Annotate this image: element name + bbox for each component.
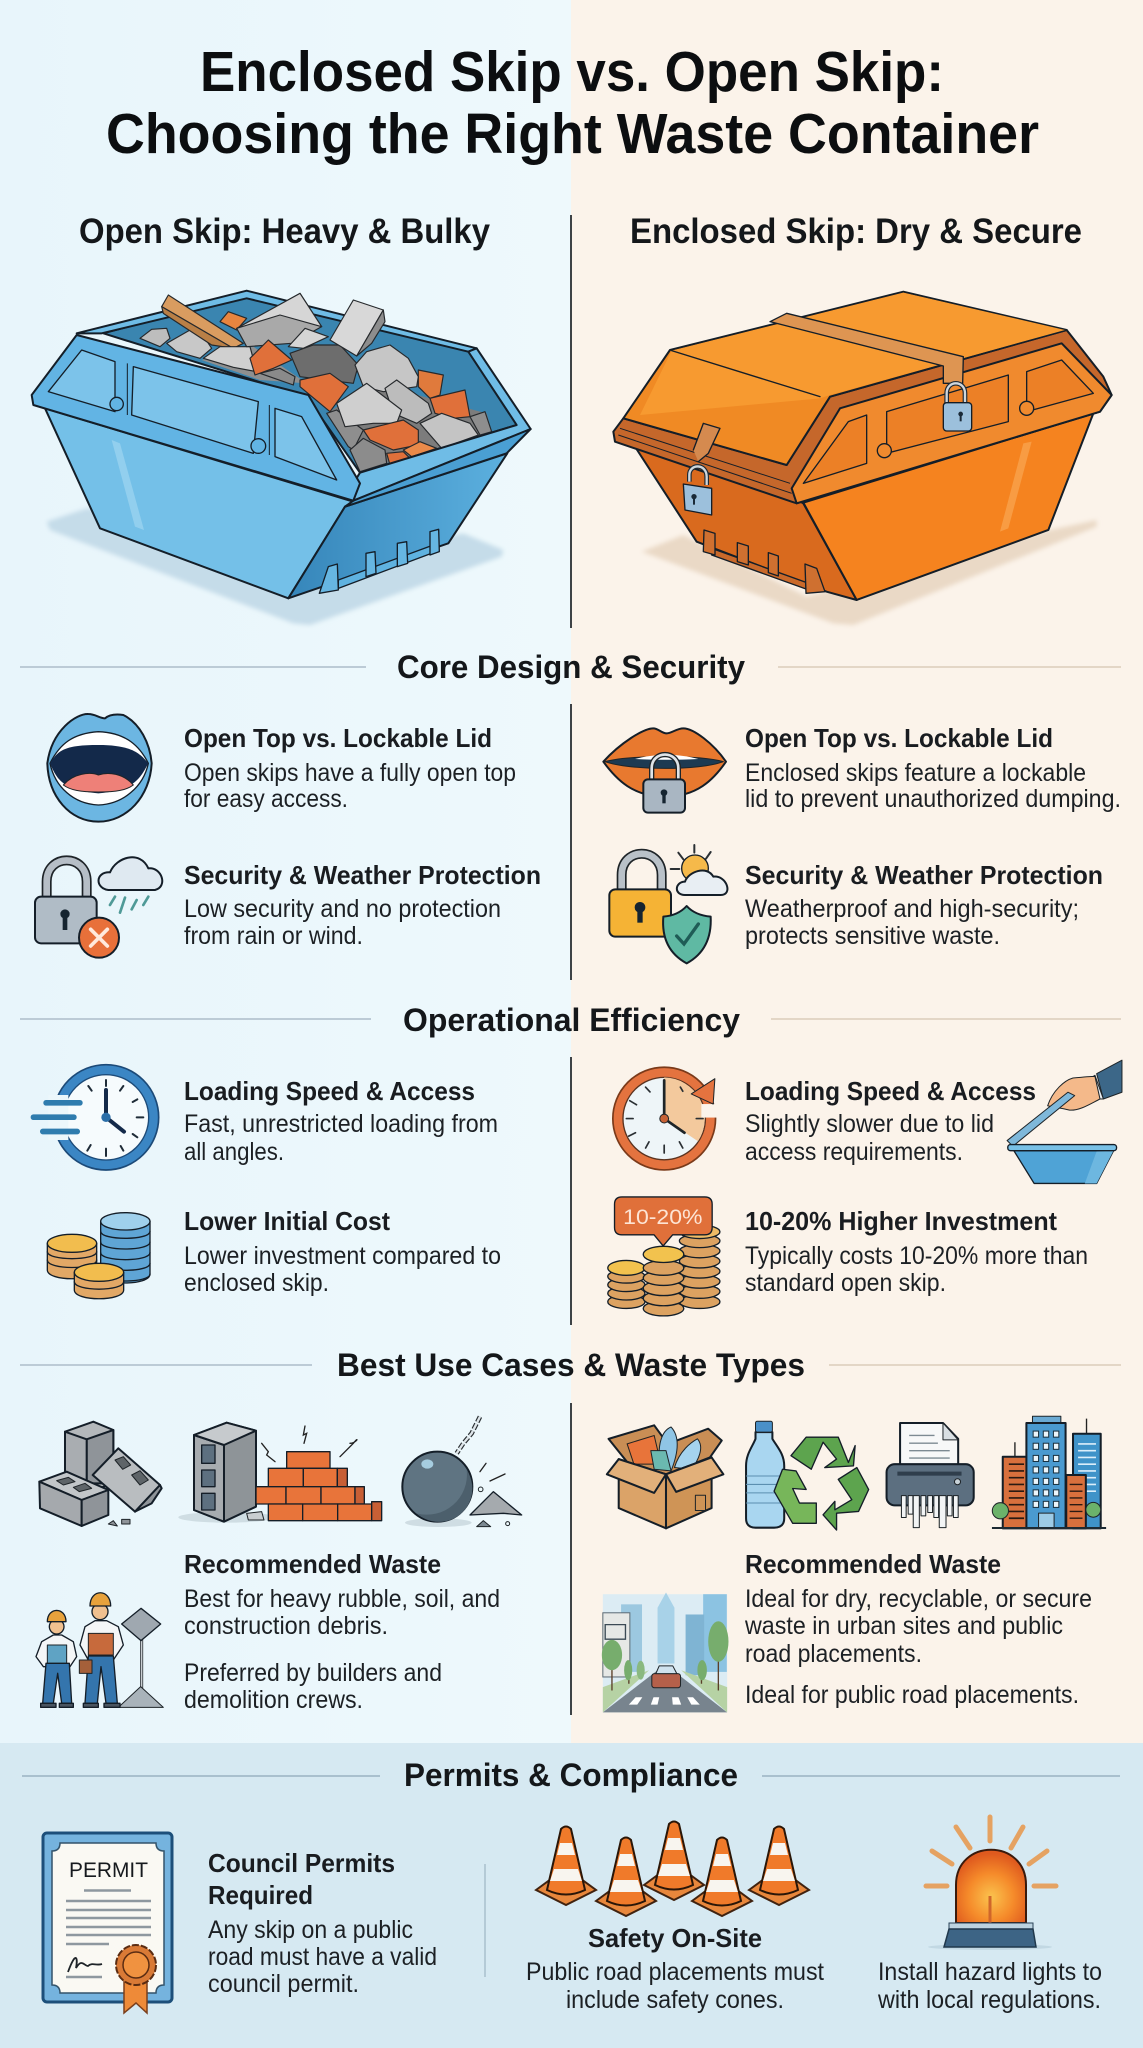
text: council permits: road must have a valid [208, 1943, 437, 1971]
icon: lips with padlock [603, 728, 726, 813]
heading: operational efficiency: Operational Efficiency [403, 1002, 740, 1038]
text: recommended waste right: Recommended Waste [745, 1549, 1001, 1579]
title: Enclosed Skip vs. Open Skip: [200, 40, 944, 104]
icon: clock with arrow [613, 1067, 722, 1170]
icon: builders and cement pile [36, 1593, 163, 1707]
text: open top: for easy access. [184, 785, 348, 813]
icon: permit certificate [43, 1833, 172, 2013]
text: lockable lid: lid to prevent unauthorized dumping. [745, 785, 1121, 813]
text: lower cost [184, 1206, 501, 1297]
icon: hazard light [926, 1817, 1056, 1950]
icon: urban street scene [602, 1593, 728, 1712]
text: loading left [184, 1076, 498, 1166]
icon: permit certificate: PERMIT [69, 1859, 148, 1882]
text: safety on-site: include safety cones. [566, 1986, 784, 2014]
text: council permits: Required [208, 1880, 313, 1910]
icons: rubble, bricks and wrecking ball [39, 1417, 522, 1527]
text: loading left: all angles. [184, 1138, 284, 1166]
text: hazard lights [877, 1958, 1102, 2014]
text: security left: from rain or wind. [184, 922, 363, 950]
title [106, 40, 1039, 166]
illustration: open skip with rubble [32, 291, 531, 625]
icon: cardboard box [607, 1425, 723, 1528]
icon: padlock, sun cloud and shield [609, 845, 727, 963]
text: recommended waste right: Ideal for dry, recyclable, or secure [745, 1585, 1092, 1613]
text: recommended waste left: Best for heavy rubble, soil, and [184, 1585, 500, 1613]
text: security right: protects sensitive waste. [745, 922, 1000, 950]
text: security right: Security & Weather Protection [745, 860, 1103, 890]
heading: core design and security: Core Design & Security [397, 649, 745, 685]
text: safety on-site [526, 1923, 824, 2014]
text: security right: Weatherproof and high-security; [745, 895, 1079, 923]
text: loading right [745, 1076, 1036, 1166]
icon: coin stacks with 10-20% badge: 10-20% [623, 1206, 703, 1229]
text: recommended waste left: Recommended Waste [184, 1549, 441, 1579]
text: security left: Security & Weather Protection [184, 860, 541, 890]
icon: fast clock [31, 1065, 159, 1170]
text: loading left: Fast, unrestricted loading from [184, 1110, 498, 1138]
text: council permits [208, 1848, 437, 1998]
title: Choosing the Right Waste Container [106, 102, 1039, 166]
text: lower cost: Lower investment compared to [184, 1242, 501, 1270]
illustration: enclosed skip with padlocks [613, 292, 1112, 625]
icon: cinder block and bricks [178, 1423, 382, 1523]
icon: recycling arrows [774, 1437, 869, 1530]
text: loading right: Loading Speed & Access [745, 1076, 1036, 1106]
icon: safety cones [536, 1822, 809, 1916]
text: open top [184, 723, 516, 813]
icon: wrecking ball [402, 1417, 522, 1527]
background: open skip side [0, 0, 571, 1743]
heading: enclosed skip: Enclosed Skip: Dry & Secure [630, 212, 1082, 251]
text: security left [184, 860, 541, 950]
text: open top: Open Top vs. Lockable Lid [184, 723, 492, 753]
text: recommended waste right: waste in urban sites and public [744, 1612, 1063, 1640]
background: permits band [0, 1743, 1143, 2048]
text: council permits: Council Permits [208, 1848, 395, 1878]
icon: coin stacks with 10-20% badge [608, 1197, 720, 1316]
icon: water bottle [746, 1421, 784, 1528]
text: hazard lights: with local regulations. [877, 1986, 1101, 2014]
text: lockable lid: Enclosed skips feature a lockable [745, 759, 1086, 787]
text: loading left: Loading Speed & Access [184, 1076, 475, 1106]
text: recommended waste left [184, 1549, 500, 1714]
text: safety on-site: Safety On-Site [588, 1923, 762, 1953]
heading: best use cases: Best Use Cases & Waste Types [337, 1347, 805, 1383]
text: recommended waste right [744, 1549, 1092, 1709]
icons: dry recyclable and secure waste [607, 1416, 1106, 1530]
icon: coin stacks low cost [47, 1213, 150, 1299]
icon: city buildings [992, 1416, 1106, 1528]
text: lower cost: enclosed skip. [184, 1269, 329, 1297]
text: lower cost: Lower Initial Cost [184, 1206, 390, 1236]
text: recommended waste left: demolition crews. [184, 1686, 363, 1714]
text: safety on-site: Public road placements must [526, 1958, 824, 1986]
text: loading right: Slightly slower due to lid [745, 1110, 994, 1138]
text: higher investment: 10-20% Higher Investment [745, 1206, 1057, 1236]
text: higher investment [745, 1206, 1088, 1297]
text: security right [745, 860, 1103, 950]
text: higher investment: standard open skip. [745, 1269, 946, 1297]
text: council permits: Any skip on a public [208, 1916, 413, 1944]
text: recommended waste left: construction debris. [184, 1612, 388, 1640]
text: recommended waste right: Ideal for public road placements. [745, 1681, 1079, 1709]
icon: concrete blocks [39, 1422, 162, 1526]
text: recommended waste left: Preferred by builders and [184, 1659, 442, 1687]
heading: open skip: Open Skip: Heavy & Bulky [79, 212, 490, 251]
icon: paper shredder [887, 1423, 974, 1528]
text: lockable lid: Open Top vs. Lockable Lid [745, 723, 1053, 753]
icon: unlocked padlock and rain cloud [35, 857, 162, 958]
text: security left: Low security and no protection [184, 895, 501, 923]
text: open top: Open skips have a fully open top [184, 759, 516, 787]
background: enclosed skip side [571, 0, 1143, 1743]
text: higher investment: Typically costs 10-20% more than [745, 1242, 1088, 1270]
text: lockable lid [745, 723, 1121, 813]
text: recommended waste right: road placements. [745, 1640, 922, 1668]
icon: hand lifting basin lid [1007, 1060, 1122, 1183]
text: hazard lights: Install hazard lights to [878, 1958, 1102, 1986]
text: council permits: council permit. [208, 1970, 359, 1998]
heading: permits and compliance: Permits & Compliance [404, 1757, 738, 1793]
text: loading right: access requirements. [745, 1138, 963, 1166]
icon: open mouth [47, 714, 152, 822]
